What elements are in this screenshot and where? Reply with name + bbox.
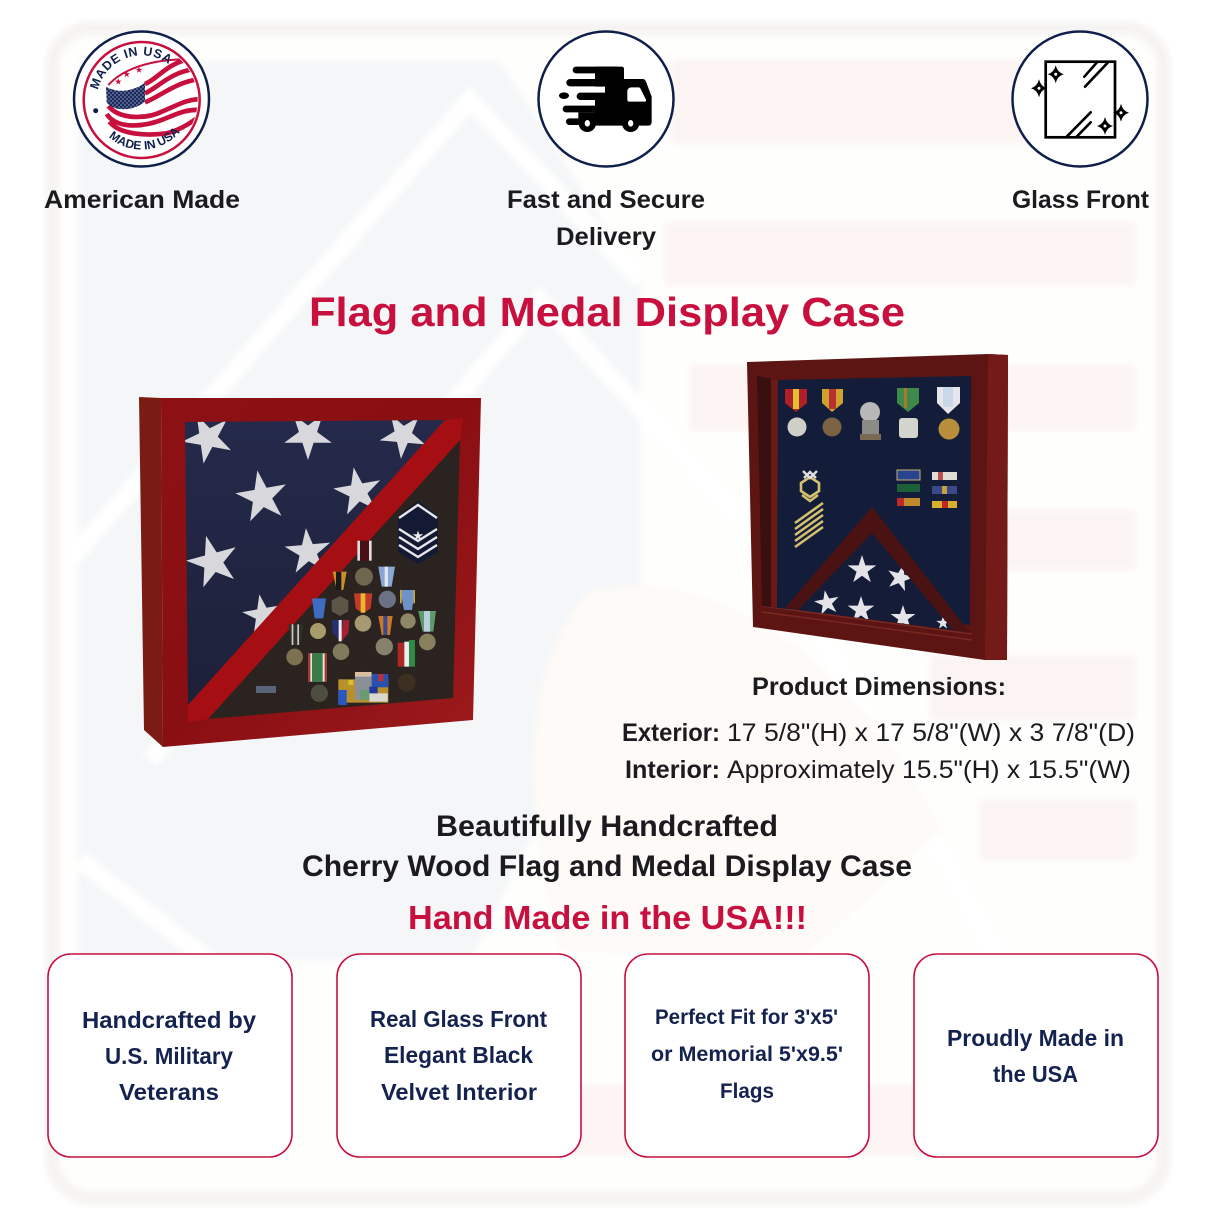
subheading: Cherry Wood Flag and Medal Display Case xyxy=(302,850,912,883)
subheading xyxy=(302,810,912,883)
ribbon rack xyxy=(338,672,388,705)
photo: walnut flag and medal case, vertical xyxy=(747,354,1008,660)
medals xyxy=(785,387,960,440)
label: American Made: American Made xyxy=(44,186,240,214)
icon: delivery truck xyxy=(538,32,674,166)
card: glass and velvet: Velvet Interior xyxy=(381,1079,537,1105)
icon: made in USA badge: MADE IN USA xyxy=(109,128,180,150)
label: Fast and Secure Delivery: Fast and Secure xyxy=(507,186,705,214)
card: made in the USA xyxy=(914,954,1158,1157)
text block: product dimensions: Product Dimensions: xyxy=(752,673,1006,701)
text block: product dimensions: 17 5/8"(H) x 17 5/8"(W) x 3 7/8"(D) xyxy=(727,719,1135,747)
rank insignia xyxy=(795,471,823,547)
photo: cherry flag and medal case, diagonal xyxy=(139,397,481,747)
text block: product dimensions: Approximately 15.5"(H) x 15.5"(W) xyxy=(727,756,1131,784)
medals xyxy=(286,541,436,705)
card: flag fit: Perfect Fit for 3'x5' xyxy=(655,1006,838,1029)
card: glass and velvet: Real Glass Front xyxy=(370,1006,547,1032)
text block: product dimensions xyxy=(622,673,1135,784)
card: glass and velvet xyxy=(337,954,581,1157)
text block: product dimensions: Exterior: xyxy=(622,719,720,747)
tagline: Hand Made in the USA!!! xyxy=(408,899,807,936)
card: flag fit xyxy=(625,954,869,1157)
icon: made in USA badge: MADE IN USA xyxy=(90,46,170,90)
card: handcrafted by veterans xyxy=(48,954,292,1157)
label: Glass Front: Glass Front xyxy=(1012,186,1150,214)
label: Fast and Secure Delivery xyxy=(507,186,705,251)
card: handcrafted by veterans: Handcrafted by xyxy=(82,1007,256,1033)
icon: made in USA badge xyxy=(72,30,210,168)
card: flag fit: or Memorial 5'x9.5' xyxy=(651,1043,843,1066)
text block: product dimensions: Interior: xyxy=(625,756,720,784)
ribbons xyxy=(897,470,957,508)
card: made in the USA: the USA xyxy=(993,1061,1078,1087)
card: glass and velvet: Elegant Black xyxy=(384,1042,533,1068)
icon: glass pane xyxy=(1012,32,1148,166)
card: handcrafted by veterans: Veterans xyxy=(119,1079,219,1105)
patch: chevron xyxy=(398,501,438,564)
title: Flag and Medal Display Case xyxy=(309,289,905,335)
label: Fast and Secure Delivery: Delivery xyxy=(556,223,656,251)
card: flag fit: Flags xyxy=(720,1080,774,1103)
card: handcrafted by veterans: U.S. Military xyxy=(105,1043,233,1069)
subheading: Beautifully Handcrafted xyxy=(436,810,778,843)
card: made in the USA: Proudly Made in xyxy=(947,1025,1124,1051)
